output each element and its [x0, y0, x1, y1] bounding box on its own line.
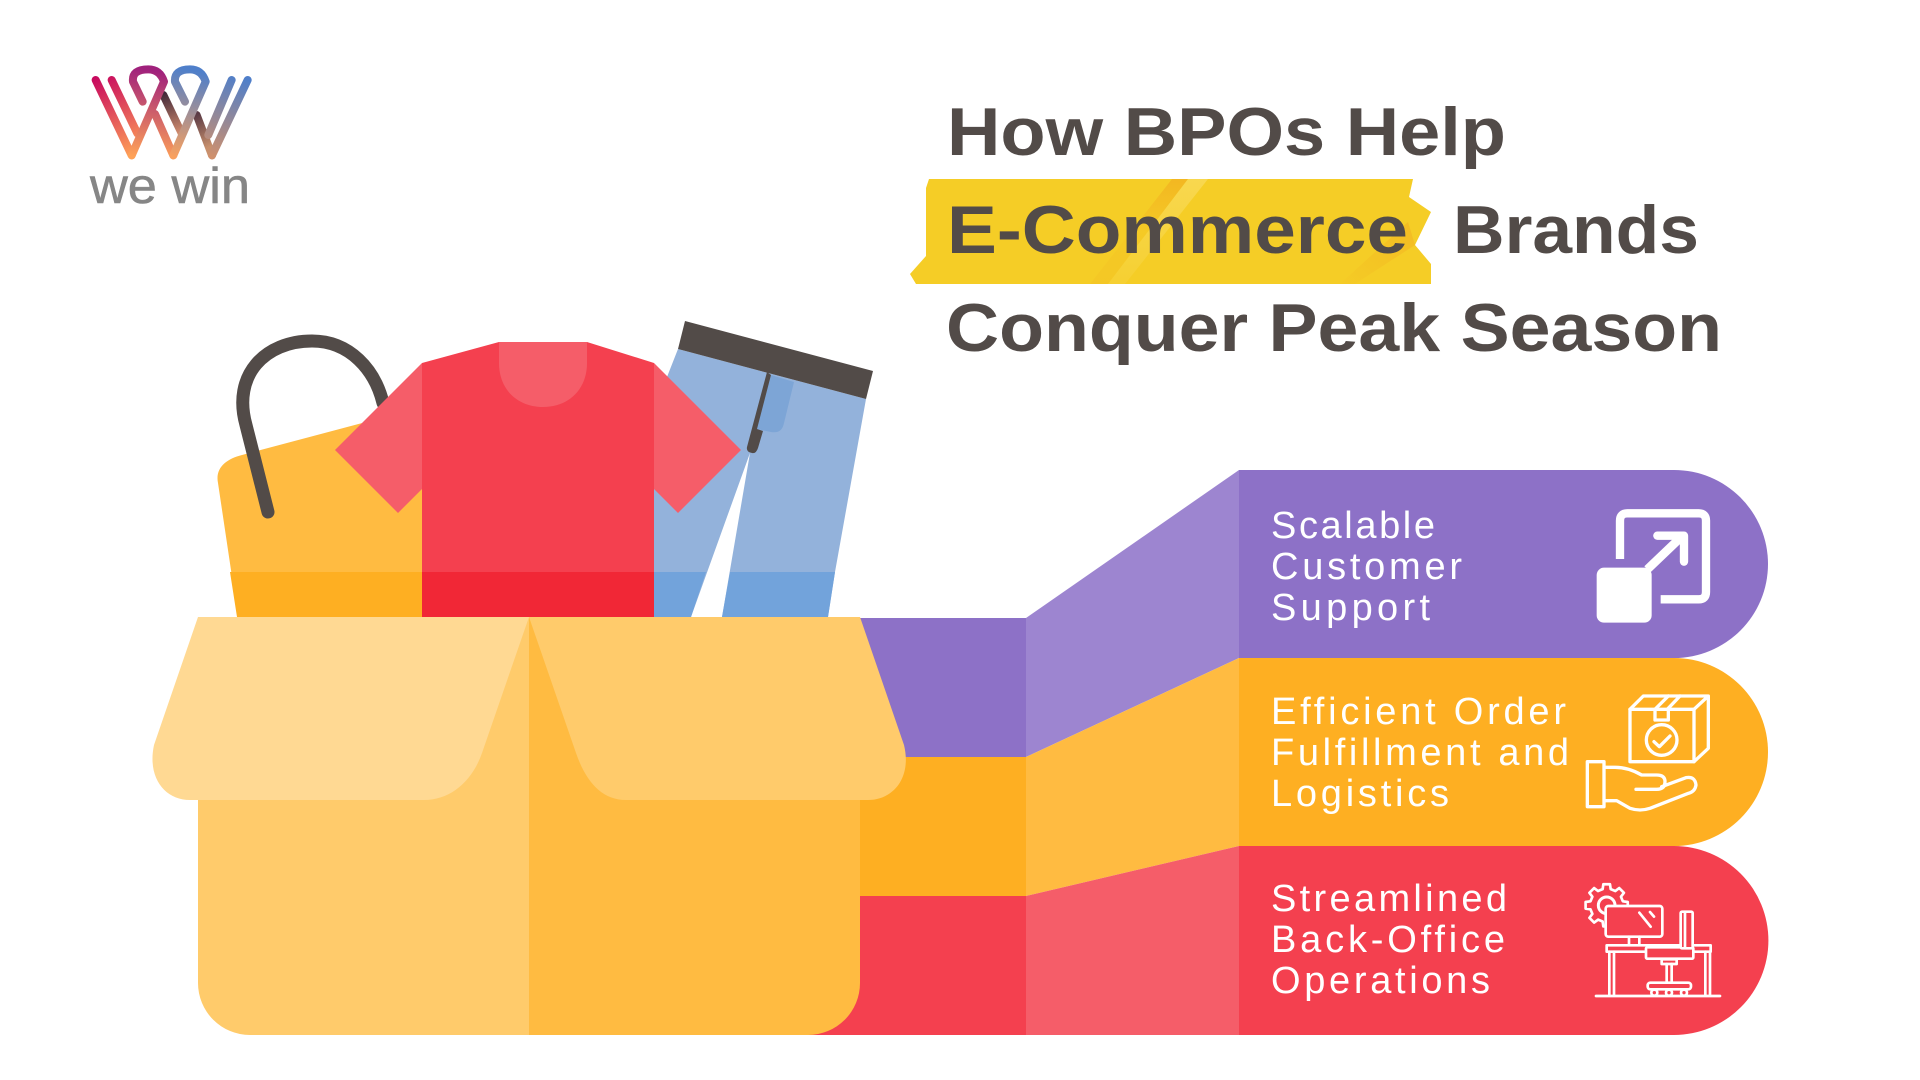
item band: red: [800, 846, 1239, 1035]
panel: efficient order fulfillment: [1239, 658, 1768, 846]
logo: we win: [89, 69, 250, 214]
text: efficient order fulfillment and logistics: [1271, 691, 1569, 815]
highlight tape: [910, 179, 1431, 284]
illustration: t-shirt: [335, 342, 741, 617]
panel: scalable customer support: [1239, 470, 1768, 658]
text: scalable customer support: Support: [1271, 587, 1430, 629]
title: [910, 94, 1722, 366]
jeans zipper: [747, 372, 771, 453]
title line 2: Brands: [1453, 192, 1699, 268]
text: scalable customer support: Scalable: [1271, 505, 1435, 547]
icon: box on hand: [1587, 696, 1708, 810]
jeans pocket: [757, 375, 794, 432]
box left flap: [152, 617, 529, 800]
box left half: [198, 617, 529, 1035]
illustration: jeans: [640, 321, 873, 617]
text: streamlined back-office operations: Streamlined: [1271, 878, 1507, 920]
jeans waistband: [678, 321, 873, 399]
illustration: cardboard box: [152, 617, 906, 1035]
item band: orange: [850, 658, 1239, 896]
text: efficient order fulfillment and logistics: Fulfillment and: [1271, 732, 1569, 774]
box right half: [529, 617, 860, 1035]
text: scalable customer support: Customer: [1271, 546, 1462, 588]
left sleeve: [335, 363, 422, 513]
tag handle: [243, 341, 383, 512]
panel: streamlined back-office operations: [1239, 846, 1768, 1035]
logo mark: [96, 69, 248, 155]
title line 2 highlighted: E-Commerce: [947, 192, 1408, 268]
illustration: price tag: [218, 341, 430, 617]
title line 3: Conquer Peak Season: [946, 290, 1722, 366]
shirt neck: [499, 342, 587, 407]
text: efficient order fulfillment and logistics: Logistics: [1271, 773, 1449, 815]
icon: desk and gear: [1586, 884, 1720, 996]
title line 1: How BPOs Help: [947, 94, 1506, 170]
item band: purple: [850, 470, 1239, 757]
logo wordmark: we win: [89, 158, 250, 214]
text: efficient order fulfillment and logistics: Efficient Order: [1271, 691, 1566, 733]
box right flap: [529, 617, 906, 800]
text: streamlined back-office operations: [1271, 878, 1507, 1002]
text: scalable customer support: [1271, 505, 1462, 629]
right sleeve: [654, 363, 741, 513]
shirt body: [422, 342, 654, 617]
icon: scale arrow: [1597, 513, 1706, 623]
text: streamlined back-office operations: Back-Office: [1271, 919, 1505, 961]
text: streamlined back-office operations: Operations: [1271, 960, 1490, 1002]
